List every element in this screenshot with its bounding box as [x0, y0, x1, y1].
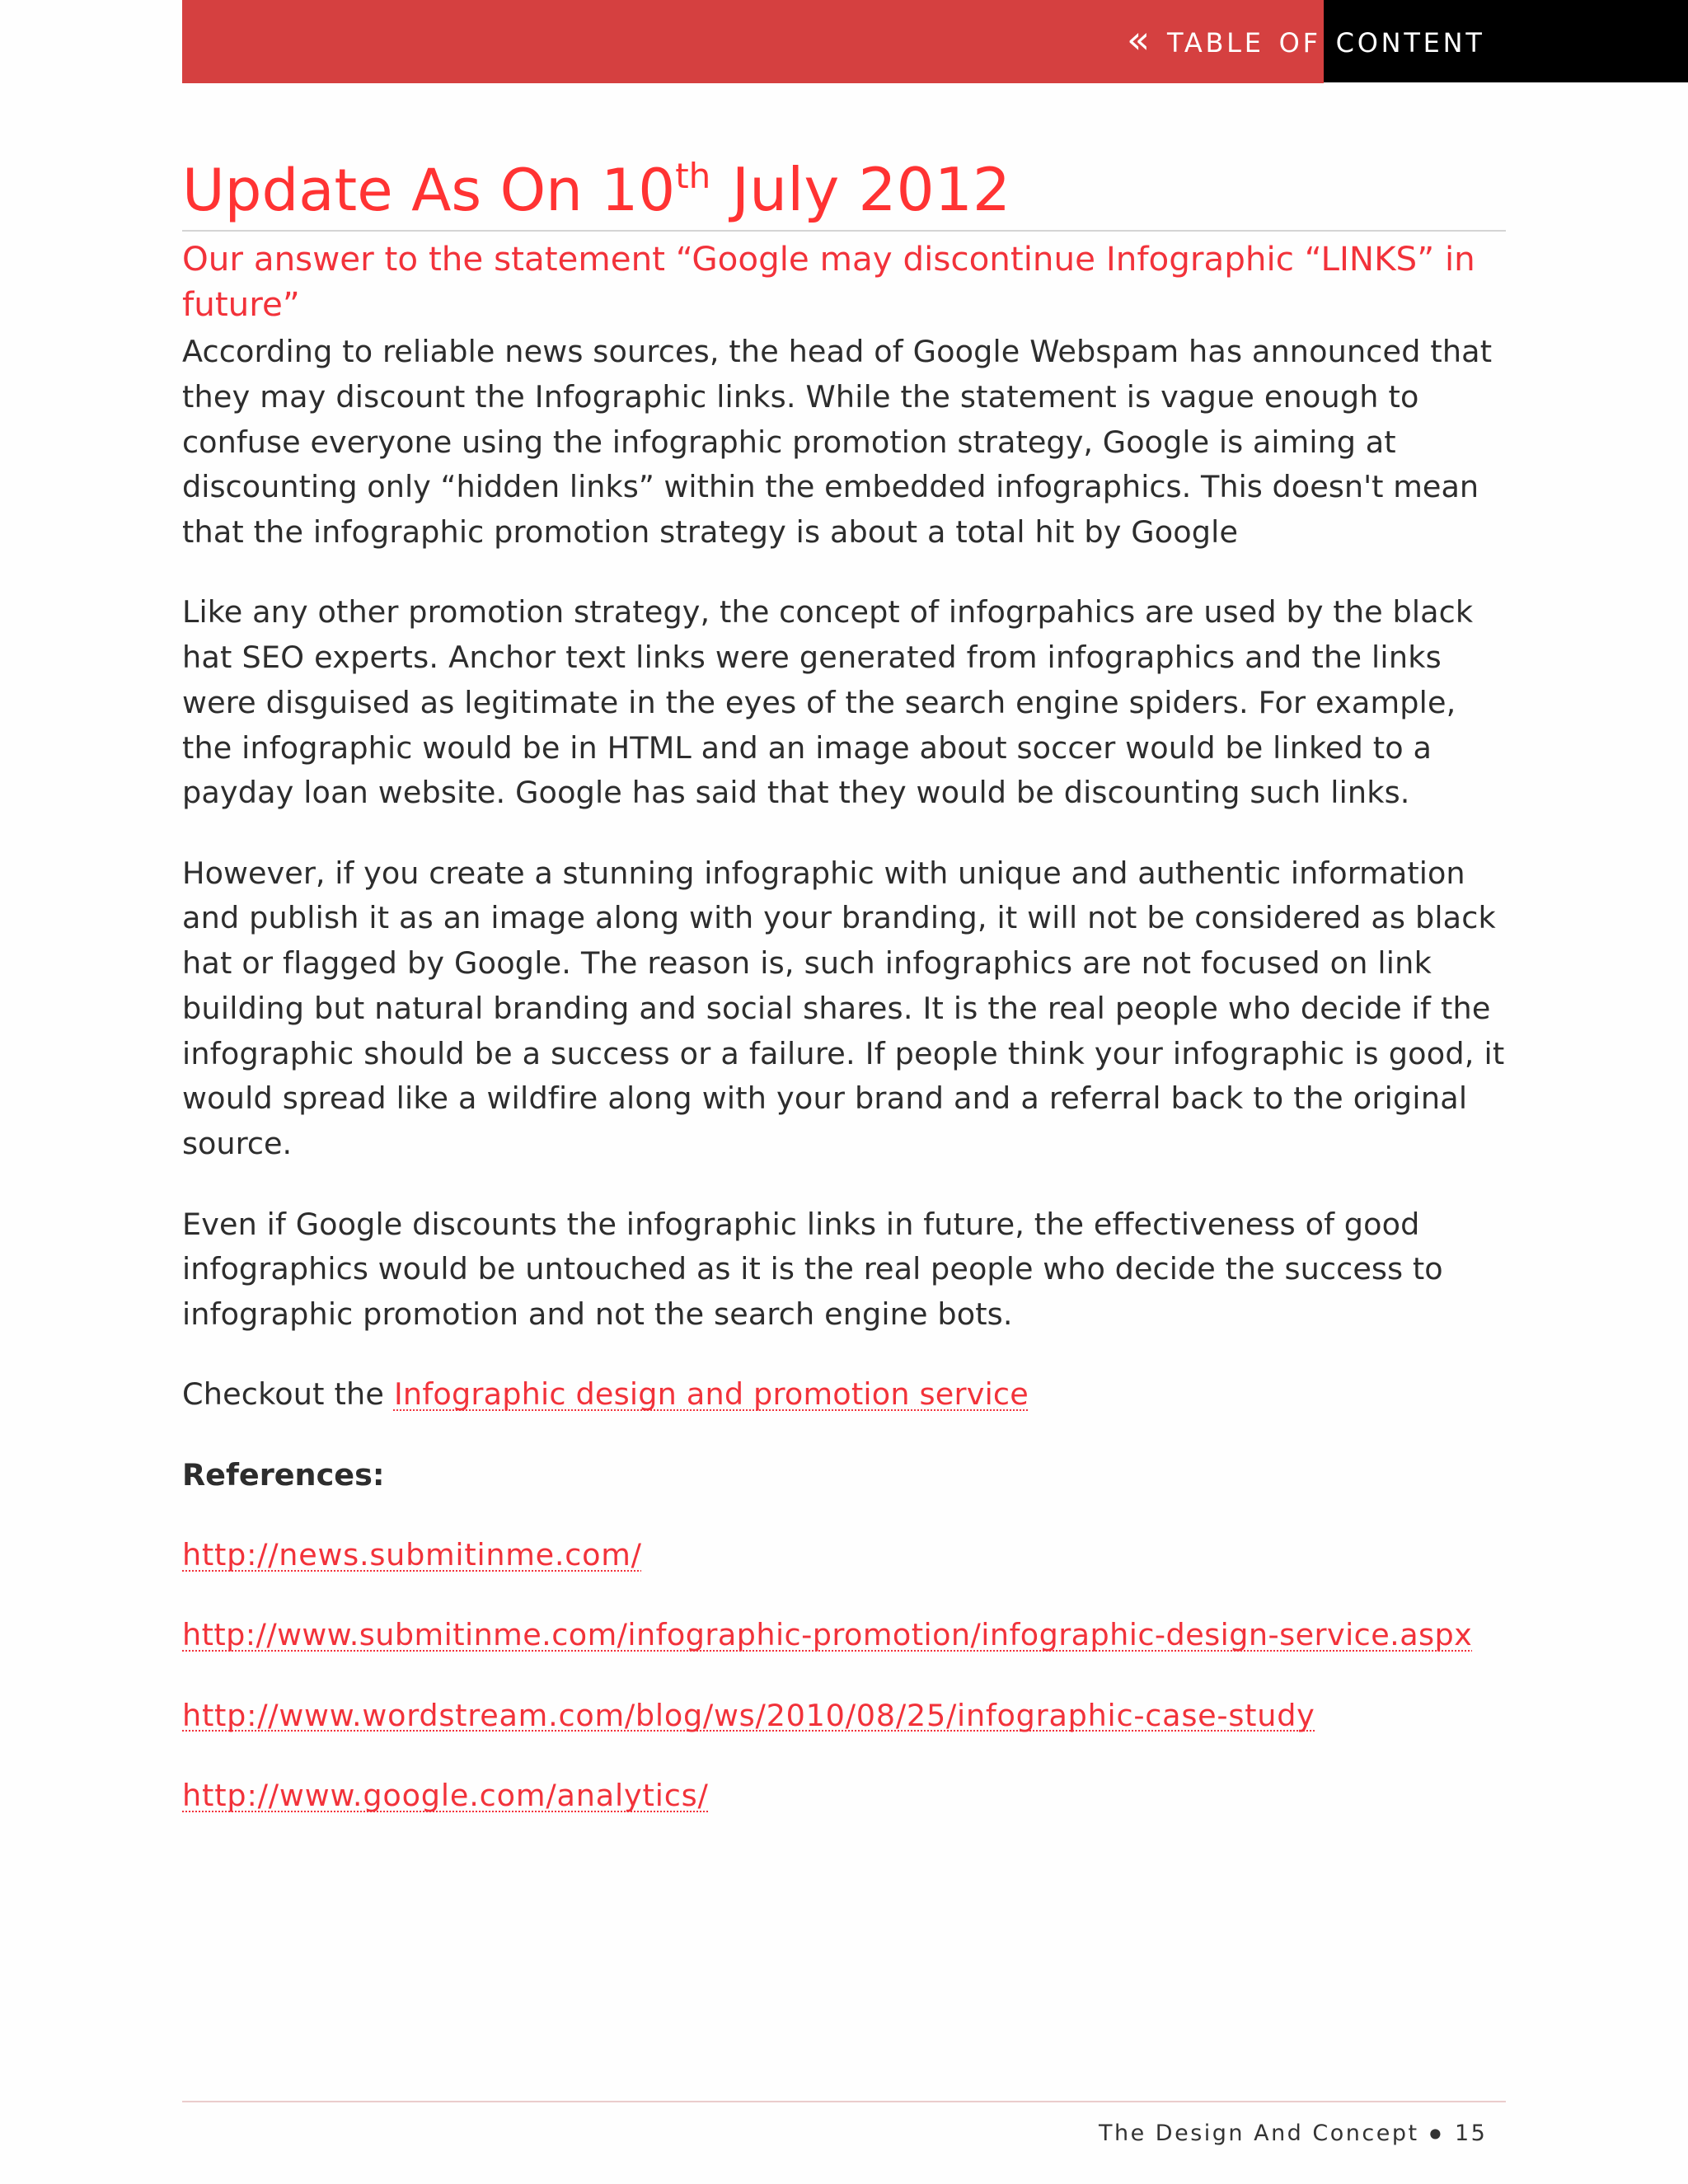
subheading [182, 239, 1475, 324]
paragraph 3: However, if you create a stunning infographic with unique and authentic information [182, 855, 1465, 891]
paragraph 3: building but natural branding and social shares. It is the real people who decide if the [182, 991, 1491, 1026]
paragraph 3: source. [182, 1126, 292, 1161]
paragraph 3: infographic should be a success or a failure. If people think your infographic is good, it [182, 1036, 1504, 1071]
header bar [182, 0, 1688, 83]
reference link 3: http://www.wordstream.com/blog/ws/2010/08/25/infographic-case-study [182, 1698, 1315, 1733]
paragraph 2: Like any other promotion strategy, the concept of infogrpahics are used by the black [182, 594, 1473, 630]
reference link 1: http://news.submitinme.com/ [182, 1537, 642, 1572]
body text [182, 334, 1504, 1813]
paragraph 3 [182, 855, 1504, 1161]
footer bullet: • [1425, 2115, 1446, 2155]
title: Update As On 10th July 2012 [182, 156, 1010, 225]
paragraph 1 [182, 334, 1492, 550]
table of content link: TABLE OF CONTENT [1167, 27, 1485, 59]
title rule [182, 230, 1506, 232]
paragraph 4: Even if Google discounts the infographic links in future, the effectiveness of good [182, 1207, 1419, 1242]
paragraph 1: confuse everyone using the infographic promotion strategy, Google is aiming at [182, 424, 1396, 460]
page number: 15 [1455, 2121, 1487, 2146]
paragraph 4 [182, 1207, 1443, 1332]
footer rule [182, 2101, 1506, 2102]
paragraph 2: were disguised as legitimate in the eyes of the search engine spiders. For example, [182, 685, 1456, 720]
paragraph 4: infographics would be untouched as it is the real people who decide the success to [182, 1251, 1443, 1286]
footer text [1098, 2115, 1487, 2155]
paragraph 2: hat SEO experts. Anchor text links were generated from infographics and the links [182, 640, 1442, 675]
paragraph 1: they may discount the Infographic links. While the statement is vague enough to [182, 379, 1419, 415]
paragraph 1: discounting only “hidden links” within the embedded infographics. This doesn't mean [182, 469, 1479, 504]
paragraph 1: that the infographic promotion strategy is about a total hit by Google [182, 514, 1238, 550]
paragraph 2 [182, 594, 1473, 810]
reference link 2: http://www.submitinme.com/infographic-promotion/infographic-design-service.aspx [182, 1617, 1472, 1652]
back chevrons icon: « [1127, 17, 1150, 62]
subheading: future” [182, 284, 300, 324]
paragraph 2: payday loan website. Google has said that they would be discounting such links. [182, 775, 1410, 810]
paragraph 4: infographic promotion and not the search engine bots. [182, 1296, 1013, 1332]
paragraph 2: the infographic would be in HTML and an image about soccer would be linked to a [182, 730, 1432, 766]
paragraph 3: hat or flagged by Google. The reason is, such infographics are not focused on link [182, 945, 1432, 981]
black band [1324, 0, 1688, 82]
red band [182, 0, 1324, 83]
paragraph 1: According to reliable news sources, the head of Google Webspam has announced that [182, 334, 1492, 369]
paragraph 3: would spread like a wildfire along with your brand and a referral back to the original [182, 1080, 1467, 1116]
footer section name: The Design And Concept [1099, 2121, 1419, 2146]
reference link 4: http://www.google.com/analytics/ [182, 1778, 709, 1813]
paragraph 3: and publish it as an image along with your branding, it will not be considered as black [182, 900, 1496, 935]
references heading: References: [182, 1457, 384, 1493]
service link line: Checkout the Infographic design and promotion service [182, 1376, 1029, 1412]
subheading: Our answer to the statement “Google may discontinue Infographic “LINKS” in [182, 239, 1475, 279]
